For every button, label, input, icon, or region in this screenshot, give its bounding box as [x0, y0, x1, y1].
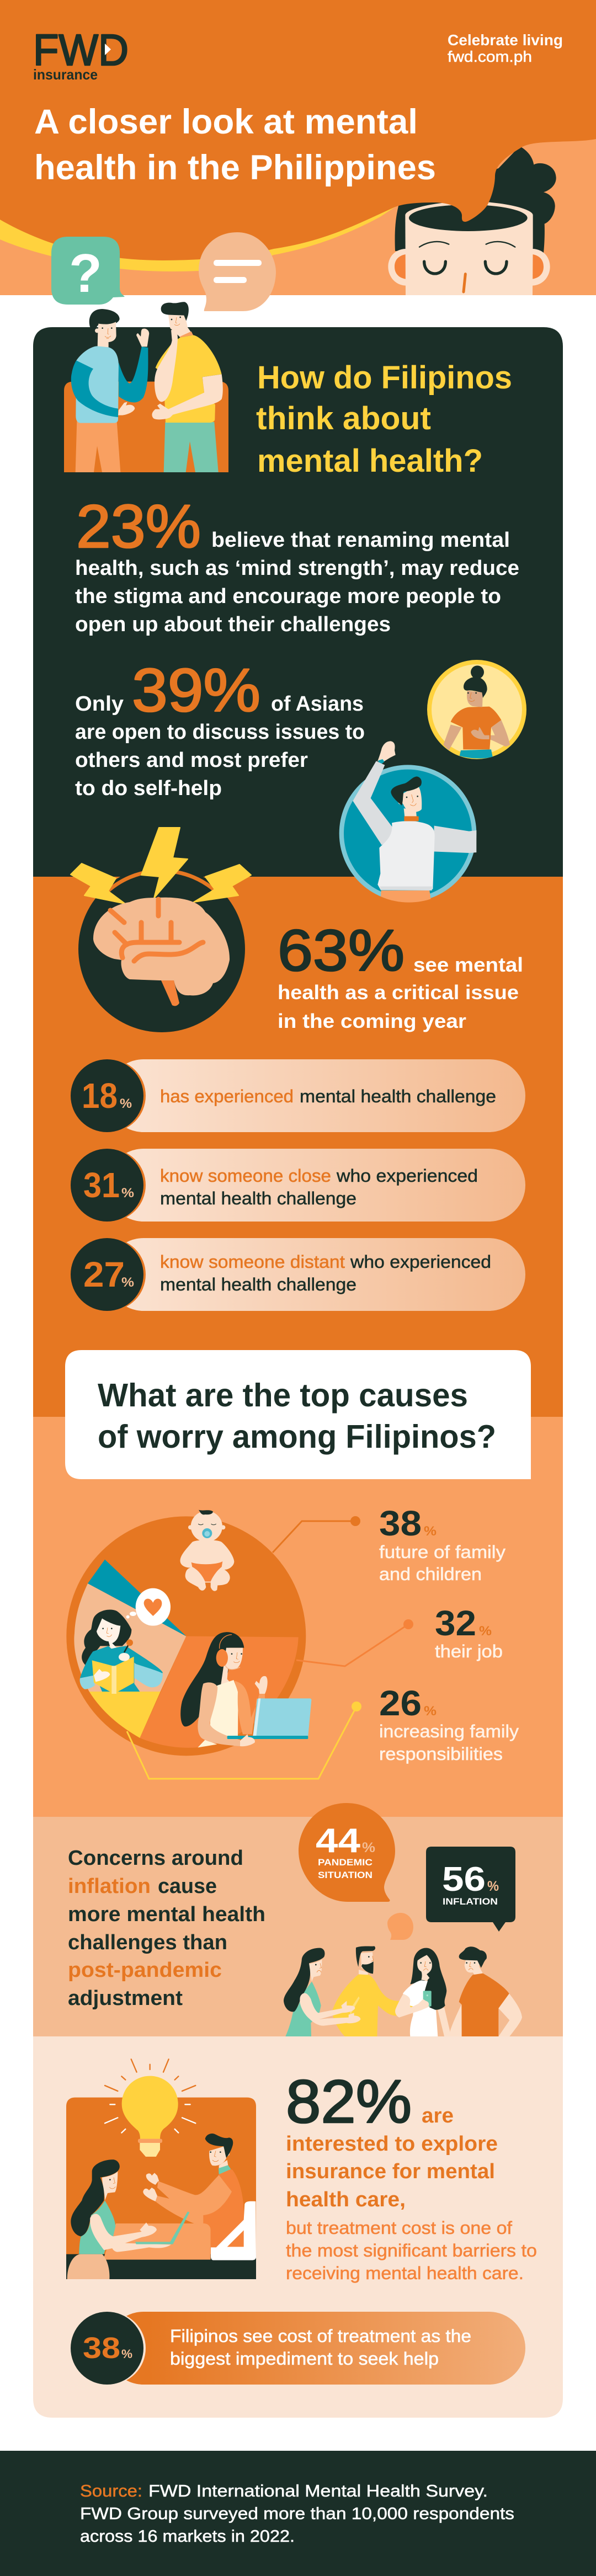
bearded man in yellow [332, 1946, 414, 2036]
stat: 32 percent their job: % [479, 1624, 492, 1639]
speech bubble: question mark: ? [69, 243, 102, 303]
bubble: 44 percent pandemic situation: 44 [316, 1822, 361, 1860]
stat: 82 percent: but treatment cost is one of [286, 2218, 512, 2238]
woman in white [395, 1948, 450, 2036]
illustration: two people with light bulb [66, 2059, 256, 2279]
small speech bubble [387, 1913, 413, 1940]
stat: 26 percent family responsibilities: 26 [379, 1683, 422, 1723]
pill: 31 percent: % [121, 1186, 134, 1201]
stat: 82 percent: insurance for mental [286, 2160, 495, 2183]
text: concerns around inflation: challenges than [68, 1931, 227, 1954]
pill: 18 percent [71, 1059, 525, 1132]
stat: 26 percent family responsibilities: responsibilities [379, 1744, 503, 1764]
stat: 63 percent [278, 918, 523, 1032]
heading: how do Filipinos think about mental health: How do Filipinos [257, 360, 512, 396]
woman with headset and laptop [180, 1632, 311, 1747]
pill: 18 percent: has experienced [160, 1086, 294, 1106]
pill: 31 percent: who experienced [336, 1166, 478, 1186]
logo: FWD insurance: insurance [33, 66, 98, 83]
text: concerns around inflation: post-pandemic [68, 1959, 222, 1982]
stat: 63 percent: see mental [413, 953, 523, 976]
bubble: 44 percent pandemic situation: SITUATION [318, 1870, 372, 1880]
panel: top causes of worry [33, 1350, 563, 1817]
bubble: 56 percent inflation: INFLATION [443, 1896, 498, 1907]
heading: how do Filipinos think about mental health: think about [256, 401, 431, 436]
stat: 39 percent: to do self-help [75, 777, 222, 800]
stat: 32 percent their job: their job [435, 1641, 503, 1661]
pill: 31 percent [71, 1149, 525, 1222]
bubble: 44 percent pandemic situation: PANDEMIC [318, 1857, 372, 1868]
stat: 39 percent: others and most prefer [75, 749, 308, 772]
stat: 82 percent: health care, [286, 2188, 406, 2211]
panel background [33, 2036, 563, 2418]
tagline and website: Celebrate living [448, 31, 563, 49]
stat: 39 percent: Only [75, 692, 124, 716]
header background [0, 0, 596, 295]
text: concerns around inflation: more mental health [68, 1903, 265, 1926]
pill: 18 percent: % [120, 1096, 132, 1111]
stat: 23 percent: believe that renaming mental [211, 529, 510, 552]
panel: inflation concerns [33, 1803, 563, 2036]
callout line: 38 percent [273, 1516, 360, 1553]
bubble: 56 percent inflation [426, 1847, 515, 1932]
footer: source: FWD International Mental Health Survey. [148, 2481, 488, 2500]
stat: 39 percent: of Asians [271, 692, 364, 716]
title [34, 103, 436, 187]
pill: 38 percent cost of treatment [71, 2312, 525, 2385]
pill: 27 percent [71, 1238, 525, 1311]
woman arms [300, 1993, 360, 2026]
panel background [33, 327, 563, 883]
pill: 18 percent: 18 [82, 1076, 118, 1116]
footer: source: FWD Group surveyed more than 10,000 respondents [80, 2504, 514, 2523]
bubble: 44 percent pandemic situation [299, 1803, 395, 1902]
illustration: two men talking [64, 302, 228, 472]
stat: 38 percent future of family: 38 [379, 1503, 422, 1543]
stat: 32 percent their job: 32 [435, 1603, 476, 1643]
footer: source: across 16 markets in 2022. [80, 2526, 295, 2546]
panel: how do Filipinos think [33, 232, 563, 883]
stat: 63 percent: in the coming year [278, 1010, 466, 1032]
pill: 27 percent: mental health challenge [160, 1274, 356, 1294]
bubble: 56 percent inflation: % [487, 1879, 499, 1894]
woman [67, 2159, 189, 2279]
text: concerns around inflation: cause [158, 1875, 217, 1898]
illustration: man waving in teal circle [339, 741, 476, 903]
stat: 39 percent [75, 657, 365, 800]
callout line: 32 percent [296, 1619, 413, 1666]
stat: 38 percent future of family: % [424, 1524, 437, 1539]
stat: 23 percent: health, such as ‘mind strength’, may reduce [75, 557, 519, 580]
text: concerns around inflation: Concerns around [68, 1847, 243, 1870]
heading card: of worry among Filipinos? [98, 1418, 496, 1455]
stat: 63 percent: 63% [278, 918, 405, 983]
pill: 27 percent: who experienced [350, 1252, 491, 1272]
panel: orange critical issue section [33, 828, 563, 1417]
illustration: woman in yellow circle [427, 660, 526, 759]
pill: 27 percent: % [121, 1275, 134, 1290]
stat: 82 percent [286, 2068, 537, 2283]
panel background [33, 1817, 563, 2036]
stat: 38 percent future of family: future of family [379, 1542, 505, 1562]
illustration: circle with baby and two women [66, 1510, 311, 1756]
logo: FWD insurance: FWD [33, 25, 129, 74]
footer: source [0, 2451, 596, 2576]
stat: 32 percent their job [435, 1603, 503, 1661]
woman reading [80, 1609, 163, 1694]
stat: 82 percent: receiving mental health care. [286, 2263, 524, 2283]
heading: how do Filipinos think about mental health [256, 360, 512, 479]
stat: 39 percent: 39% [132, 657, 260, 724]
stat: 23 percent: the stigma and encourage more people to [75, 585, 501, 608]
chair [211, 2201, 256, 2260]
text: concerns around inflation: inflation [68, 1875, 151, 1898]
stat: 26 percent family responsibilities: % [424, 1704, 437, 1719]
pill: 18 percent: mental health challenge [300, 1086, 496, 1106]
bubble: 44 percent pandemic situation: % [362, 1840, 375, 1855]
text: concerns around inflation [68, 1847, 265, 2010]
stat: 38 percent future of family: and children [379, 1564, 482, 1584]
heading card [65, 1350, 531, 1479]
heart thought bubble [126, 1588, 171, 1626]
panel: insurance interest [33, 2036, 563, 2418]
tagline and website: fwd.com.ph [448, 48, 532, 65]
panel background [33, 1417, 563, 1817]
stat: 26 percent family responsibilities: increasing family [379, 1721, 519, 1741]
callout line: 26 percent [127, 1702, 361, 1779]
heading: how do Filipinos think about mental health: mental health? [257, 443, 483, 479]
stat: 63 percent: health as a critical issue [278, 981, 519, 1004]
stat: 82 percent: 82% [286, 2068, 412, 2136]
footer: source: Source: [80, 2481, 142, 2500]
stat: 23 percent: 23% [76, 493, 201, 561]
woman in green dress [284, 1948, 325, 2036]
illustration: head with open top [388, 146, 556, 295]
header orange wave [0, 0, 596, 260]
stat: 82 percent: the most significant barriers to [286, 2241, 537, 2260]
pill: 31 percent: know someone close [160, 1166, 331, 1186]
speech bubble: question mark [51, 237, 125, 305]
pill: 31 percent: mental health challenge [160, 1188, 356, 1208]
pill: 27 percent: know someone distant [160, 1252, 345, 1272]
title: health in the Philippines [34, 148, 436, 187]
stat: 82 percent: are [422, 2104, 454, 2127]
pill: 31 percent: 31 [83, 1165, 120, 1205]
stat: 39 percent: are open to discuss issues to [75, 721, 365, 744]
panel background [33, 877, 563, 1417]
stat: 38 percent future of family [379, 1503, 505, 1584]
tagline and website [448, 31, 563, 65]
stat: 26 percent family responsibilities [379, 1683, 519, 1764]
illustration: four people talking [284, 1946, 522, 2036]
pill: 27 percent: 27 [83, 1255, 125, 1294]
light bulb [105, 2059, 195, 2157]
illustration: brain with lightning [71, 828, 251, 1032]
speech bubble: peach [199, 232, 276, 311]
pill: 38 percent cost of treatment: 38 [83, 2332, 120, 2365]
text: concerns around inflation: adjustment [68, 1987, 183, 2010]
stat: 23 percent [75, 493, 519, 636]
baby [180, 1510, 234, 1591]
pill: 38 percent cost of treatment: Filipinos see cost of treatment as the [170, 2326, 471, 2346]
pill: 38 percent cost of treatment: % [121, 2347, 132, 2361]
heading card: What are the top causes [98, 1377, 468, 1414]
pill: 38 percent cost of treatment: biggest impediment to seek help [170, 2349, 439, 2369]
man [143, 2134, 244, 2247]
stat: 82 percent: interested to explore [286, 2132, 498, 2156]
bubble: 56 percent inflation: 56 [442, 1860, 486, 1898]
man in orange [450, 1946, 522, 2036]
title: A closer look at mental [34, 103, 418, 141]
stat: 23 percent: open up about their challenges [75, 613, 391, 636]
